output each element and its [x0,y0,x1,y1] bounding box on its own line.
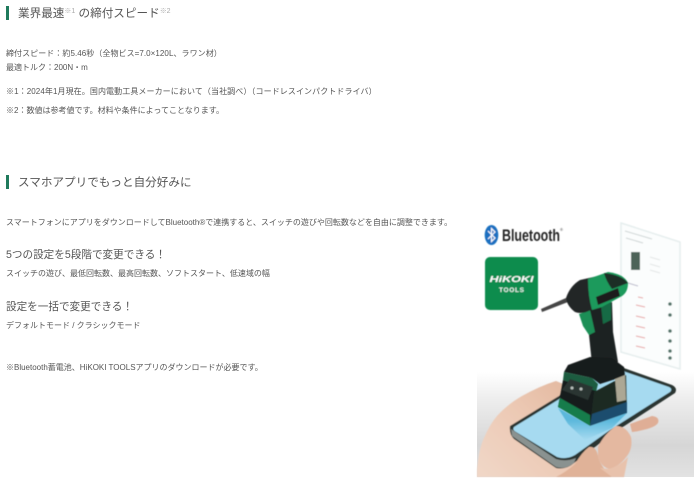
label plate [596,288,620,305]
footnote 1: ※1：2024年1月現在。国内電動工具メーカーにおいて（当社調べ）（コードレスインパクトドライバ） [6,87,377,96]
battery left panel lights [562,379,593,400]
footnote 2: ※2：数値は参考値です。材料や条件によってことなります。 [6,106,224,115]
icon: Bluetooth logo: ® [560,227,563,232]
green housing [588,272,628,310]
icon: HiKOKI TOOLS app: TOOLS [499,287,525,294]
text: torque spec: 最適トルク：200N・m [6,63,88,72]
text: fastening speed spec: 締付スピード：約5.46秒（全物ビス=7.0×120L、ラワン材） [6,49,222,58]
battery lower green band [558,398,590,426]
subheading: batch settings: 設定を一括で変更できる！ [6,301,133,313]
heading: fastest fastening speed: 業界最速※1 の締付スピード※2 [18,7,171,20]
handle [582,302,618,364]
gradient backdrop [477,372,694,477]
battery reflection [558,408,627,440]
hand holding the phone [477,365,676,477]
icon: HiKOKI TOOLS app [485,257,538,310]
top dark cap [604,273,628,289]
battery left face [558,380,596,425]
metal belt hook [615,375,626,402]
text: five settings list: スイッチの遊び、最低回転数、最高回転数、ソフトスタート、低速域の幅 [6,269,270,278]
middle finger [598,426,632,469]
subheading: five settings: 5つの設定を5段階で変更できる！ [6,249,166,261]
footnote: Bluetooth requirements: ※Bluetooth蓄電池、HiKOKI TOOLSアプリのダウンロードが必要です。 [6,363,263,372]
lower finger [556,447,612,477]
palm [477,381,596,477]
icon: HiKOKI TOOLS app: HiKOKI [490,275,535,284]
battery green collar [563,372,598,392]
driver bit [541,298,568,312]
icon: Bluetooth logo [485,225,563,245]
battery top [564,357,625,384]
app screen panel [621,223,680,369]
phone body [510,365,676,468]
side finger [630,416,658,432]
text: modes: デフォルトモード / クラシックモード [6,321,141,330]
heading: customise with smartphone app: スマホアプリでもっと自分好みに [18,176,192,189]
nose [566,276,600,313]
phone screen [513,368,671,458]
battery right face [590,375,627,426]
impact driver tool [541,272,628,440]
text: app introduction: スマートフォンにアプリをダウンロードしてBluetooth®で連携すると、スイッチの遊びや回転数などを自由に調整できます。 [6,218,452,227]
green grip strip [579,310,595,335]
icon: Bluetooth logo: Bluetooth [502,226,560,245]
